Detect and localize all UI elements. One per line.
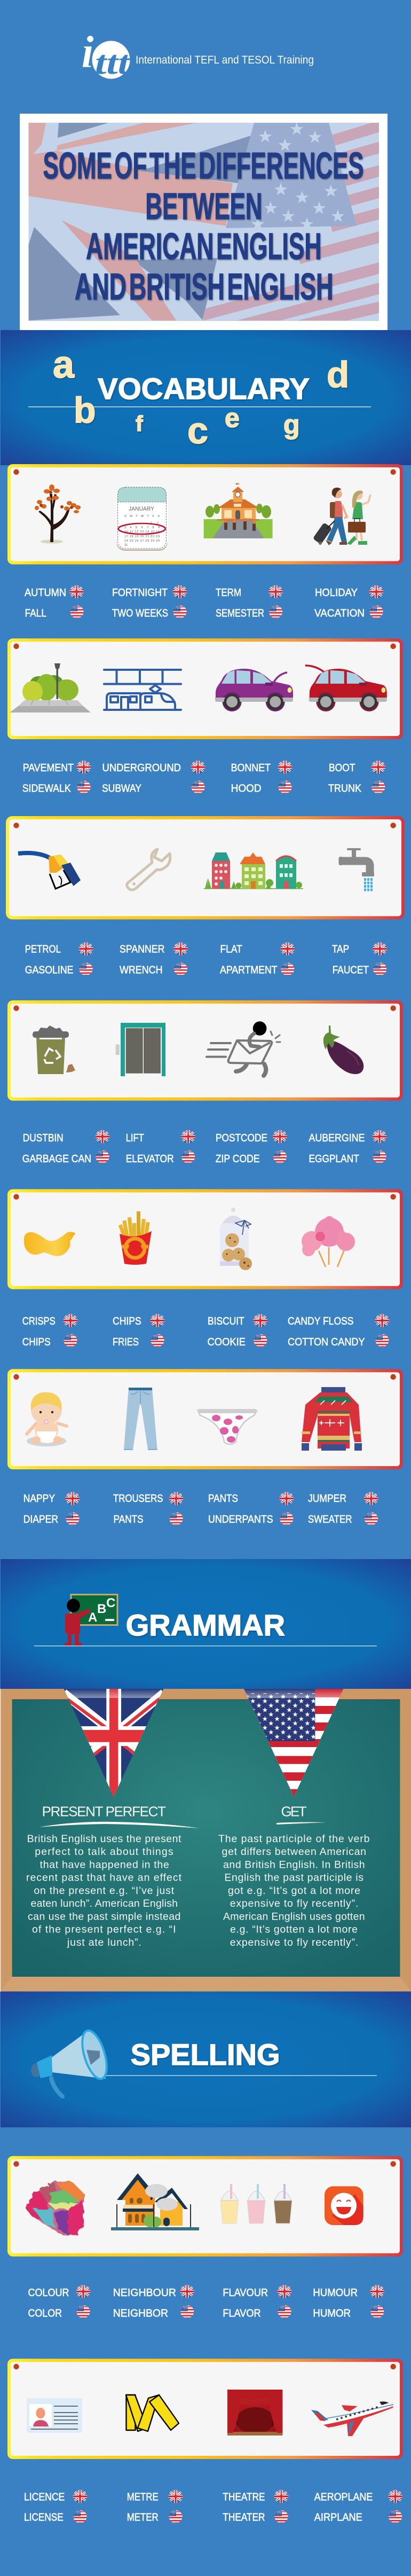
text: present perfect: just ate lunch”. [67,1937,141,1948]
panel: crisps, chips, biscuit, candy floss [7,1189,403,1289]
label: pavement / sidewalk: SIDEWALK [22,782,71,795]
label: chips / fries [113,1313,165,1348]
icon: calendar: 1 2 [151,522,159,525]
label: lift / elevator [126,1130,196,1165]
icon: postal courier [207,1021,280,1076]
letters: f [136,411,143,436]
icon: smiley app [325,2186,363,2225]
label: boot / trunk: BOOT [329,762,355,774]
label: licence / license [24,2489,88,2524]
label: bonnet / hood [231,760,293,795]
labels: nappy row [23,1492,378,1525]
label: autumn / fall [25,585,84,620]
labels: colour row [28,2284,385,2319]
label: pavement / sidewalk [22,760,91,795]
icon: teacher at chalkboard: C [106,1596,115,1610]
icon: neighbour houses [111,2173,199,2230]
letters: b [74,390,96,430]
bunting flag: UK [64,1689,164,1797]
title background: faded flags [28,122,387,333]
icon: flavoured drinks [220,2184,292,2223]
label: dustbin / garbage can: DUSTBIN [23,1132,64,1144]
label: term / semester: TERM [216,586,241,599]
label: boot / trunk: TRUNK [328,782,361,795]
icon: theatre stage [227,2390,282,2436]
icon: autumn tree [35,484,81,544]
labels: pavement row [22,760,386,795]
letters: g [283,410,300,440]
icon: fries [118,1211,152,1265]
label: holiday / vacation: VACATION [314,607,365,620]
band: grammar [1,1559,411,1689]
icon: pavement [10,663,91,712]
label: aeroplane / airplane: AIRPLANE [314,2511,362,2524]
label: candy floss / cotton candy [288,1313,390,1348]
label: underground / subway [102,760,206,795]
label: postcode / zip code [216,1130,287,1165]
label: holiday / vacation [314,585,384,620]
icon: crisp [24,1232,75,1256]
title text: BETWEEN [145,185,262,227]
icon: car with open bonnet [215,669,293,711]
icon: underground train [104,670,181,710]
icon: calendar [116,486,168,551]
label: dustbin / garbage can [22,1130,110,1165]
label: flavour / flavor: FLAVOR [223,2307,261,2319]
panel: dustbin, lift, postcode, aubergine [7,1000,403,1101]
label: tap / faucet: FAUCET [333,964,369,976]
label: crisps / chips: CRISPS [22,1315,56,1327]
label: spanner / wrench [120,942,188,976]
label: candy floss / cotton candy: CANDY FLOSS [288,1315,353,1327]
icon: paint splash [26,2181,85,2237]
text: present perfect: eaten lunch”. American English [31,1898,178,1909]
label: tap / faucet [332,942,388,976]
icon: apartment houses [204,852,303,889]
label: theatre / theater: THEATER [223,2511,265,2524]
logo: ITTT: International TEFL and TESOL Training [136,54,314,66]
label: fortnight / two weeks: TWO WEEKS [112,607,168,620]
icon: candy floss [302,1216,355,1267]
label: flavour / flavor [223,2284,292,2319]
label: jumper / sweater: JUMPER [308,1492,346,1505]
label: colour / color: COLOR [28,2307,62,2319]
text: present perfect [26,1803,199,1948]
labels: petrol row [25,942,388,976]
label: dustbin / garbage can: GARBAGE CAN [22,1153,91,1165]
label: boot / trunk [328,760,386,795]
letters [53,343,349,451]
label: humour / humor: HUMOR [313,2307,351,2319]
labels: dustbin row [22,1130,387,1165]
heading: spelling: SPELLING [131,2038,280,2071]
icon: calendar: 17 18 19 20 21 22 23 [124,535,160,538]
label: petrol / gasoline [25,942,93,976]
icon: calendar: 3 4 5 6 7 8 9 [124,526,160,529]
letters: e [225,403,240,433]
label: pavement / sidewalk: PAVEMENT [23,762,74,774]
icon: spanner [127,849,170,890]
label: aeroplane / airplane [314,2489,403,2524]
letters: d [327,354,349,395]
label: biscuit / cookie: BISCUIT [208,1315,244,1327]
text: get: American English uses gotten [223,1911,365,1922]
label: nappy / diaper: NAPPY [23,1492,55,1505]
icon: trousers [124,1388,157,1450]
label: tap / faucet: TAP [332,943,349,956]
heading: vocabulary: VOCABULARY [98,372,310,405]
label: colour / color: COLOUR [28,2287,69,2299]
text: present perfect: recent past that have an effect [26,1872,182,1884]
text: present perfect: on the present e.g. “I’ve just [34,1885,175,1897]
label: flat / apartment [220,942,295,976]
text: present perfect: that have happened in the [40,1859,169,1870]
label: nappy / diaper [23,1492,80,1525]
text: present perfect: British English uses the present [27,1833,181,1845]
icon: aeroplane [311,2401,394,2436]
icon: megaphone [31,2027,112,2096]
label: autumn / fall: AUTUMN [25,586,66,599]
label: flavour / flavor: FLAVOUR [223,2287,268,2299]
panel: licence, metre, theatre, aeroplane [7,2359,403,2459]
label: postcode / zip code: ZIP CODE [216,1153,260,1165]
text: present perfect: PRESENT PERFECT [42,1803,166,1819]
heading: grammar [34,1595,377,1646]
title panel [20,114,388,333]
label: aubergine / eggplant: AUBERGINE [309,1132,365,1144]
label: flat / apartment: APARTMENT [220,964,278,976]
label: pants / underpants: PANTS [208,1492,238,1505]
label: neighbour / neighbor: NEIGHBOR [113,2307,168,2319]
labels: autumn row [25,585,384,620]
label: crisps / chips [22,1313,78,1348]
icon: aubergine [323,1025,363,1074]
icon: calendar: 24 25 26 27 28 29 30 [124,539,160,543]
label: metre / meter: METRE [127,2491,159,2503]
text: get [218,1803,370,1948]
panel: autumn, fortnight, term, holiday [7,464,403,565]
text: get: GET [281,1803,307,1819]
label: bonnet / hood: HOOD [231,782,262,795]
text: get: got e.g. “It’s got a lot more [228,1885,360,1897]
label: colour / color [28,2284,91,2319]
logo: ITTT [81,26,314,81]
label: metre / meter [127,2489,183,2524]
icon: tap [338,848,374,891]
label: underground / subway: SUBWAY [102,782,141,795]
label: holiday / vacation: HOLIDAY [315,586,358,599]
label: trousers / pants [113,1492,184,1525]
title text [43,145,364,308]
icon: teacher at chalkboard: B [97,1602,106,1616]
text: present perfect: of the present perfect e.g. “I [32,1924,176,1936]
label: fortnight / two weeks [112,585,187,620]
icon: school [204,483,273,538]
panel: colour, neighbour, flavour, humour [7,2156,403,2257]
label: postcode / zip code: POSTCODE [216,1132,267,1144]
label: jumper / sweater [308,1492,378,1525]
icon: baby [27,1392,67,1446]
letters: c [187,410,208,451]
label: biscuit / cookie: COOKIE [207,1336,246,1348]
letters: a [53,343,75,386]
label: neighbour / neighbor: NEIGHBOUR [113,2287,176,2299]
text: get: e.g. “It’s gotten a lot more [230,1924,358,1936]
label: theatre / theater [223,2489,289,2524]
labels: licence row [24,2489,403,2524]
band: vocabulary [1,330,411,465]
label: chips / fries: FRIES [113,1336,139,1348]
label: lift / elevator: ELEVATOR [126,1153,174,1165]
label: candy floss / cotton candy: COTTON CANDY [288,1336,365,1348]
text: present perfect: perfect to talk about things [35,1846,173,1858]
icon: calendar: 31 [124,544,128,547]
logo: ITTT: ttt [95,45,130,81]
label: aubergine / eggplant: EGGPLANT [309,1153,359,1165]
label: aeroplane / airplane: AEROPLANE [314,2491,373,2503]
label: fortnight / two weeks: FORTNIGHT [112,586,168,599]
label: humour / humor: HUMOUR [313,2287,358,2299]
icon: underpants [197,1409,257,1444]
labels: crisps row [22,1313,390,1348]
icon: teacher at chalkboard [65,1595,117,1646]
label: trousers / pants: TROUSERS [113,1492,163,1505]
panel: pavement, underground, bonnet, boot [7,638,403,739]
logo: ITTT: i [81,26,94,77]
label: chips / fries: CHIPS [113,1315,141,1327]
label: spanner / wrench: WRENCH [120,964,162,976]
icon: travellers [313,488,370,545]
label: pants / underpants: UNDERPANTS [208,1513,273,1525]
label: petrol / gasoline: PETROL [25,943,61,956]
label: licence / license: LICENCE [24,2491,65,2503]
label: aubergine / eggplant [309,1130,387,1165]
text: present perfect: can use the past simple instead [28,1911,180,1922]
icon: lift [116,1023,165,1076]
panel: nappy, trousers, pants, jumper [7,1369,403,1469]
icon: calendar: S M T W T F S [124,515,160,518]
icon: car with open boot [305,665,387,711]
label: term / semester [216,585,283,620]
text: get: The past participle of the verb [218,1833,370,1845]
text: get: and British English. In British [223,1859,365,1870]
label: petrol / gasoline: GASOLINE [25,964,74,976]
icon: teacher at chalkboard: A [88,1610,97,1625]
band: spelling [1,1992,411,2127]
label: humour / humor [313,2284,385,2319]
heading: grammar: GRAMMAR [126,1608,285,1642]
label: term / semester: SEMESTER [216,607,264,620]
heading: spelling [31,2027,377,2096]
text: get: English the past participle is [224,1872,363,1884]
label: pants / underpants [208,1492,294,1525]
label: trousers / pants: PANTS [114,1513,144,1525]
label: jumper / sweater: SWEATER [308,1513,352,1525]
label: spanner / wrench: SPANNER [120,943,164,956]
label: flat / apartment: FLAT [220,943,242,956]
bunting flag: US [244,1689,344,1797]
icon: licence card [27,2398,82,2433]
chalkboard [0,1689,411,1992]
heading: vocabulary [28,343,371,451]
label: metre / meter: METER [127,2511,159,2524]
icon: dustbin [33,1025,75,1074]
label: bonnet / hood: BONNET [231,762,271,774]
label: nappy / diaper: DIAPER [23,1513,58,1525]
label: lift / elevator: LIFT [126,1132,144,1144]
label: crisps / chips: CHIPS [22,1336,51,1348]
label: neighbour / neighbor [113,2284,195,2319]
text: get: expensive to fly recently”. [230,1898,358,1909]
text: get: expensive to fly recently”. [230,1937,358,1948]
icon: jumper [302,1387,362,1451]
icon: biscuit jar [220,1208,252,1270]
label: underground / subway: UNDERGROUND [102,762,181,774]
label: theatre / theater: THEATRE [223,2491,265,2503]
text: get: get differs between American [222,1846,366,1858]
label: licence / license: LICENSE [24,2511,64,2524]
label: biscuit / cookie [207,1313,268,1348]
icon: calendar: JANUARY [129,506,155,512]
icon: calendar: 10 11 12 13 14 15 16 [124,530,160,534]
label: autumn / fall: FALL [25,607,46,620]
icon: petrol nozzle [18,853,81,889]
icon: folding rulers [126,2395,179,2431]
panel: petrol, spanner, flat, tap [6,816,405,919]
